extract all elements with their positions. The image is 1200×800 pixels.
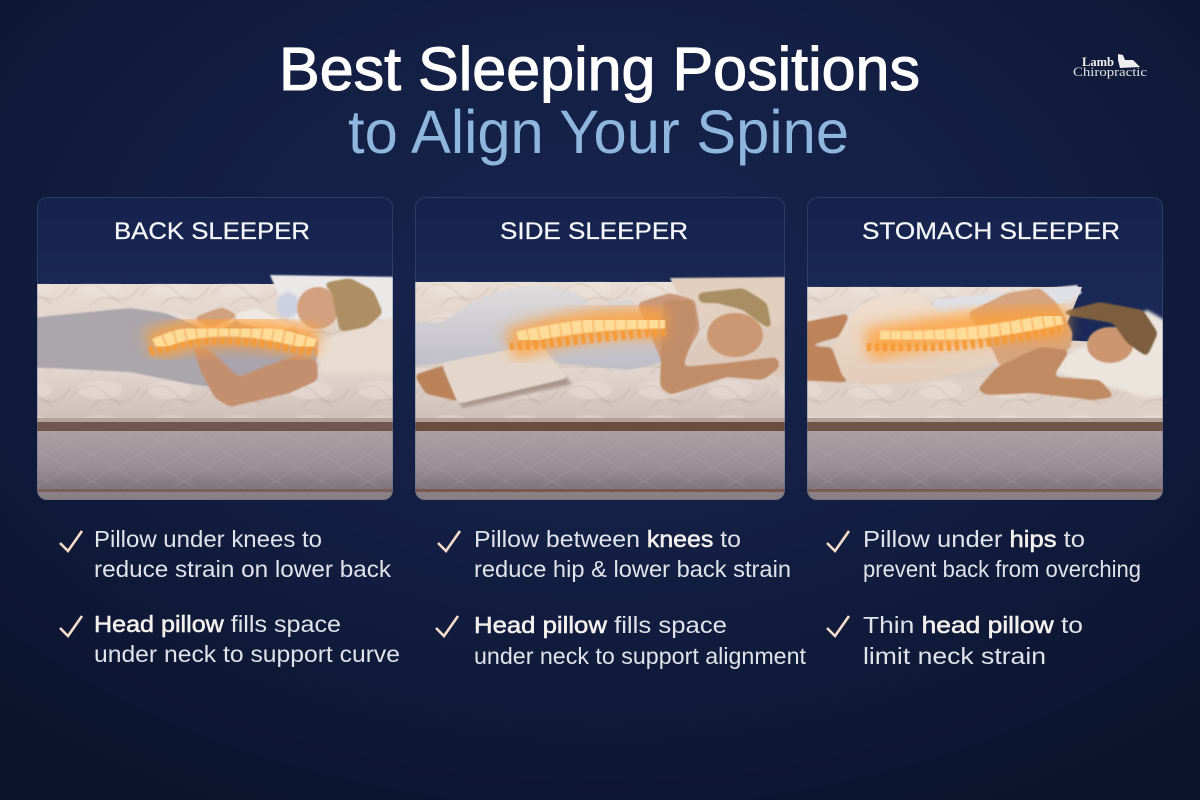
panel: stomach sleeper <box>800 197 1170 500</box>
checklist: side sleeper <box>436 526 806 669</box>
check icon <box>438 531 460 551</box>
panel: side sleeper <box>415 258 785 500</box>
tip 2: under neck to support alignment <box>474 643 806 669</box>
panel border: back <box>38 198 392 500</box>
knee pillow shadow <box>459 375 572 409</box>
glowing spine <box>867 318 1067 349</box>
check icon <box>60 616 82 636</box>
panel: back sleeper <box>30 197 400 500</box>
tip 1 <box>474 526 791 582</box>
glowing spine <box>510 322 665 348</box>
back skin <box>967 288 1073 367</box>
title: to Align Your Spine <box>348 98 849 166</box>
dress <box>832 293 1000 385</box>
arm <box>193 345 318 407</box>
face <box>1087 327 1133 363</box>
back skin <box>637 293 700 365</box>
heading: stomach sleeper: STOMACH SLEEPER <box>862 218 1120 245</box>
legs <box>807 314 848 383</box>
tip 2: Head pillow fills space <box>94 611 341 637</box>
panel border: stomach <box>808 198 1162 500</box>
check icon <box>60 531 82 551</box>
panel border: side <box>416 198 784 500</box>
chest top <box>237 308 290 330</box>
head pillow <box>318 322 393 372</box>
checklist: stomach sleeper <box>827 526 1141 669</box>
check icon <box>436 616 458 636</box>
hands <box>196 307 236 327</box>
hair <box>697 288 772 330</box>
hair <box>323 278 383 332</box>
tip 1: Pillow under knees to <box>94 526 322 552</box>
checklist: back sleeper <box>60 526 400 667</box>
body clothing <box>405 285 663 370</box>
lower leg <box>416 366 458 402</box>
rear pillow <box>669 276 785 327</box>
heading: side sleeper: SIDE SLEEPER <box>500 218 688 245</box>
pillow shadow patch <box>277 292 299 318</box>
tip 2: Thin head pillow to <box>863 612 1083 638</box>
tip 1 <box>863 526 1141 582</box>
hair <box>1057 302 1158 357</box>
tip 1: Pillow under hips to <box>863 526 1085 552</box>
face <box>707 313 763 357</box>
tip 1: reduce strain on lower back <box>94 556 391 582</box>
face <box>297 287 339 329</box>
tip 1: prevent back from overching <box>863 556 1141 582</box>
logo: Lamb Chiropractic <box>1073 54 1147 79</box>
tip 2: Head pillow fills space <box>474 612 727 638</box>
arm <box>977 347 1115 400</box>
title <box>279 35 920 166</box>
tip 1 <box>94 526 391 582</box>
tip 2: limit neck strain <box>863 643 1046 669</box>
head pillow <box>688 331 785 378</box>
tip 2 <box>474 612 806 669</box>
glowing spine <box>150 330 317 354</box>
tip 1: Pillow between knees to <box>474 526 741 552</box>
tip 2 <box>94 611 400 667</box>
tip 2: under neck to support curve <box>94 641 400 667</box>
torso <box>216 320 318 376</box>
check icon <box>827 531 849 551</box>
heading: back sleeper: BACK SLEEPER <box>114 218 310 245</box>
knee pillow <box>442 352 566 404</box>
rear pillow <box>270 275 400 322</box>
logo: Lamb Chiropractic: Chiropractic <box>1073 64 1147 79</box>
head pillow <box>1056 308 1163 396</box>
check icon <box>827 616 849 636</box>
logo: Lamb Chiropractic: Lamb <box>1082 55 1114 69</box>
neck <box>284 328 318 350</box>
arm <box>660 300 780 395</box>
tip 1: reduce hip & lower back strain <box>474 556 791 582</box>
tip 2 <box>863 612 1083 669</box>
blanket over legs <box>30 308 220 388</box>
title: Best Sleeping Positions <box>279 35 920 103</box>
rear pillow <box>932 284 1083 312</box>
